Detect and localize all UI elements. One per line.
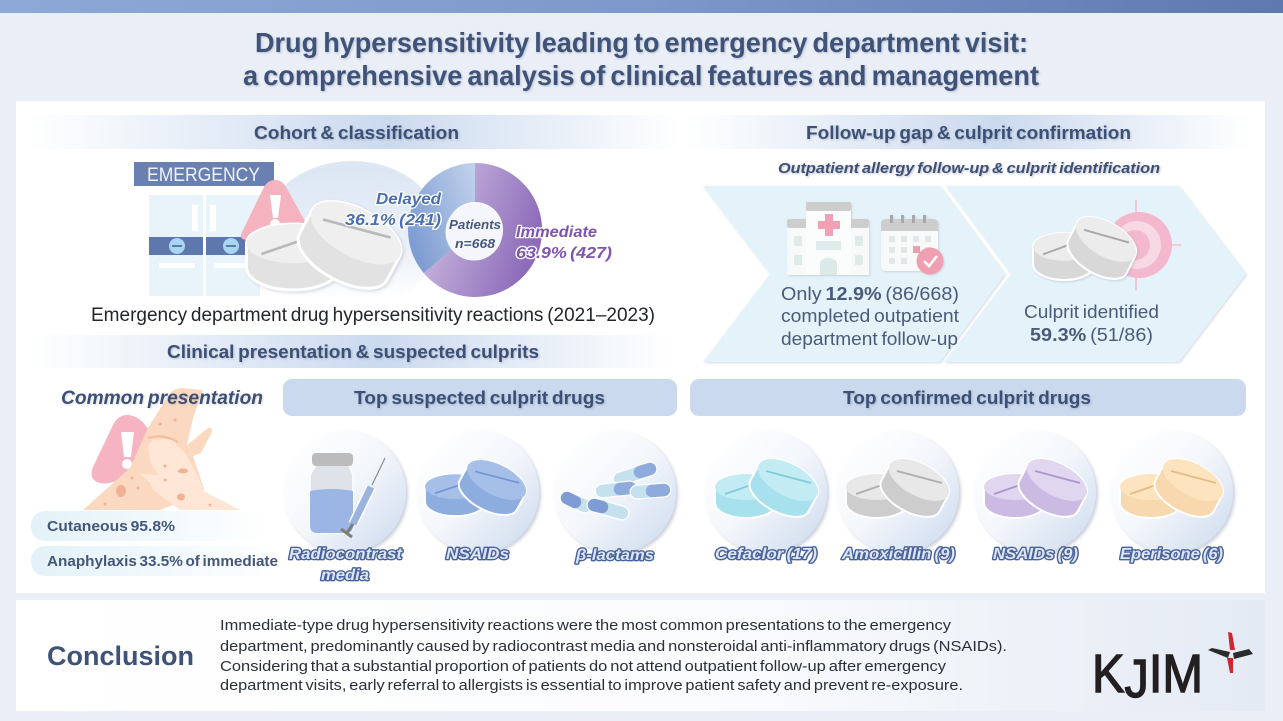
drug: radiocontrast media: Radiocontrast xyxy=(289,546,403,563)
icon: emergency door: EMERGENCY xyxy=(147,165,260,186)
heading: top confirmed: Top confirmed culprit drugs xyxy=(843,387,1091,408)
panel: top confirmed culprit drugs xyxy=(690,379,1246,563)
step: culprit identified xyxy=(944,186,1246,362)
stat: cutaneous: Cutaneous 95.8% xyxy=(47,519,175,535)
logo: KJIM: J xyxy=(1125,649,1149,709)
text: conclusion body: Immediate-type drug hypersensitivity reactions were the most common presentations to the emergency xyxy=(220,618,952,634)
text: culprit rate xyxy=(1024,302,1159,345)
donut chart: patients by reaction type: Delayed xyxy=(376,191,442,208)
panel: cohort and classification xyxy=(28,115,680,326)
text: culprit rate: Culprit identified xyxy=(1024,302,1159,322)
step: outpatient follow-up xyxy=(703,186,1005,362)
icon: tablets xyxy=(246,189,411,301)
text: culprit rate: 59.3% (51/86) xyxy=(1030,325,1153,345)
stat: anaphylaxis: Anaphylaxis 33.5% of immediate xyxy=(47,554,278,570)
text: conclusion body: Considering that a substantial proportion of patients do not attend outpatient follow-up after emergency xyxy=(220,659,947,675)
caption: study population: Emergency department drug hypersensitivity reactions (2021–2023) xyxy=(91,305,655,326)
stat: cutaneous xyxy=(31,511,266,541)
drug: amoxicillin xyxy=(837,431,959,563)
donut chart: patients by reaction type: 63.9% (427) xyxy=(516,245,612,262)
icon: calendar xyxy=(881,215,944,274)
icon: rash on arm and hand xyxy=(83,388,240,510)
drug: NSAIDs xyxy=(417,431,539,563)
subpanel: top suspected culprit drugs xyxy=(283,379,677,584)
drug: cefaclor xyxy=(705,431,827,563)
drug: eperisone xyxy=(1111,431,1233,563)
title: a comprehensive analysis of clinical features and management xyxy=(243,60,1039,91)
subpanel: common presentation xyxy=(31,388,281,576)
drug: NSAIDs xyxy=(974,431,1096,563)
logo: KJIM xyxy=(1092,632,1253,709)
heading: top suspected: Top suspected culprit drugs xyxy=(354,387,605,408)
text: conclusion body: department visits, early referral to allergists is essential to improve patient safety and prevent re-exposure. xyxy=(220,678,963,694)
text: follow-up rate: department follow-up xyxy=(781,329,958,349)
icon: tablets xyxy=(1033,208,1143,288)
drug: amoxicillin: Amoxicillin (9) xyxy=(841,546,955,563)
icon: warning triangle xyxy=(92,415,150,484)
drug: beta-lactams: β-lactams xyxy=(575,547,654,564)
heading: cohort and classification: Cohort & classification xyxy=(254,122,459,143)
heading: follow-up gap xyxy=(685,115,1250,149)
top bar xyxy=(0,0,1283,13)
drug: beta-lactams xyxy=(554,431,676,564)
logo: KJIM: K xyxy=(1092,644,1128,704)
donut chart: patients by reaction type xyxy=(345,163,612,297)
heading: clinical presentation: Clinical presentation & suspected culprits xyxy=(167,341,539,362)
heading: top suspected xyxy=(283,379,677,416)
text: follow-up rate: completed outpatient xyxy=(781,306,959,326)
subheading: common presentation: Common presentation xyxy=(61,388,263,409)
heading: cohort and classification xyxy=(28,115,680,149)
donut chart: patients by reaction type: 36.1% (241) xyxy=(345,212,441,229)
stat: anaphylaxis xyxy=(31,546,281,576)
panel: clinical presentation and suspected culprits xyxy=(28,335,677,584)
title xyxy=(243,27,1039,91)
main white panel xyxy=(16,101,1265,593)
heading: top confirmed xyxy=(690,379,1246,416)
drug: NSAIDs: NSAIDs (9) xyxy=(993,546,1078,563)
halo behind illustration xyxy=(262,161,442,307)
drug: radiocontrast media: media xyxy=(321,567,369,584)
drug: eperisone: Eperisone (6) xyxy=(1120,546,1223,563)
text: conclusion body xyxy=(220,618,1007,694)
logo: KJIM: IM xyxy=(1149,644,1203,704)
drug: radiocontrast media xyxy=(284,431,406,584)
panel: conclusion xyxy=(16,600,1265,711)
donut chart: patients by reaction type: Immediate xyxy=(516,224,597,241)
icon: warning triangle xyxy=(241,180,312,240)
drug: NSAIDs: NSAIDs xyxy=(446,546,509,563)
icon: emergency door xyxy=(134,162,274,296)
icon: target xyxy=(1106,200,1181,290)
heading: follow-up gap: Follow-up gap & culprit confirmation xyxy=(806,122,1131,143)
title: Drug hypersensitivity leading to emergency department visit: xyxy=(255,27,1028,58)
subheading: outpatient follow-up: Outpatient allergy follow-up & culprit identification xyxy=(778,160,1160,177)
text: follow-up rate xyxy=(781,284,959,349)
icon: capsules xyxy=(567,469,664,513)
panel: follow-up gap and culprit confirmation xyxy=(685,115,1250,362)
icon: vial and syringe xyxy=(310,453,385,537)
text: follow-up rate: Only 12.9% (86/668) xyxy=(781,284,959,304)
heading: conclusion: Conclusion xyxy=(47,641,194,671)
icon: hospital xyxy=(787,202,869,275)
drug: cefaclor: Cefaclor (17) xyxy=(715,546,817,563)
heading: clinical presentation xyxy=(28,335,670,368)
text: conclusion body: department, predominantly caused by radiocontrast media and nonsteroidal anti-inflammatory drugs (NSAIDs). xyxy=(220,639,1007,655)
donut chart: patients by reaction type: Patients xyxy=(449,218,501,232)
donut chart: patients by reaction type: n=668 xyxy=(455,237,495,251)
